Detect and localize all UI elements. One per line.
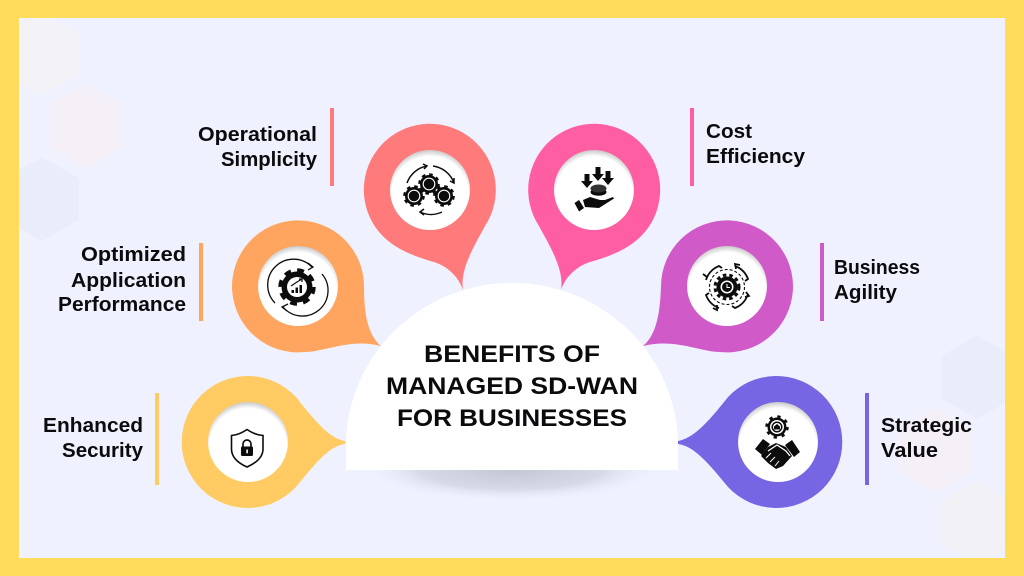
label: strategic value: Strategic	[881, 414, 972, 437]
label: business agility	[820, 243, 920, 321]
icon: three gears with arrows	[405, 164, 454, 215]
label: operational simplicity: Operational	[198, 123, 317, 146]
title	[386, 341, 638, 432]
label: optimized application performance: Application	[71, 269, 186, 292]
central dome	[346, 283, 678, 470]
label: strategic value	[865, 393, 972, 485]
label: optimized application performance: Optimized	[81, 243, 186, 266]
label: operational simplicity: Simplicity	[221, 148, 318, 171]
dome shadow	[360, 438, 664, 502]
label: business agility: Agility	[834, 281, 898, 304]
title: MANAGED SD-WAN	[386, 373, 638, 400]
label: optimized application performance: Performance	[58, 293, 186, 316]
icon: gear with chart and circular arrows	[268, 259, 328, 316]
icon: gear clock with arrows	[703, 264, 749, 310]
pin: optimized application performance	[232, 220, 381, 352]
label: cost efficiency	[690, 108, 806, 186]
label: business agility: Business	[834, 256, 920, 279]
pin: strategic value	[678, 376, 842, 508]
icon: shield with lock	[232, 430, 263, 467]
label: operational simplicity	[198, 108, 334, 186]
pin: business agility	[643, 220, 793, 352]
title: BENEFITS OF	[424, 341, 600, 368]
label: cost efficiency: Cost	[706, 120, 752, 143]
pin: cost efficiency	[528, 124, 660, 290]
label: enhanced security: Enhanced	[43, 414, 143, 437]
label: enhanced security	[43, 393, 159, 485]
title: FOR BUSINESSES	[397, 405, 627, 432]
pin: operational simplicity	[364, 124, 496, 290]
label: cost efficiency: Efficiency	[706, 145, 806, 168]
label: strategic value: Value	[881, 439, 938, 462]
pin: enhanced security	[182, 376, 345, 508]
label: optimized application performance	[58, 243, 203, 321]
label: enhanced security: Security	[62, 439, 144, 462]
icon: handshake with gear	[755, 416, 800, 469]
icon: hand with coins and down arrows	[574, 167, 614, 212]
